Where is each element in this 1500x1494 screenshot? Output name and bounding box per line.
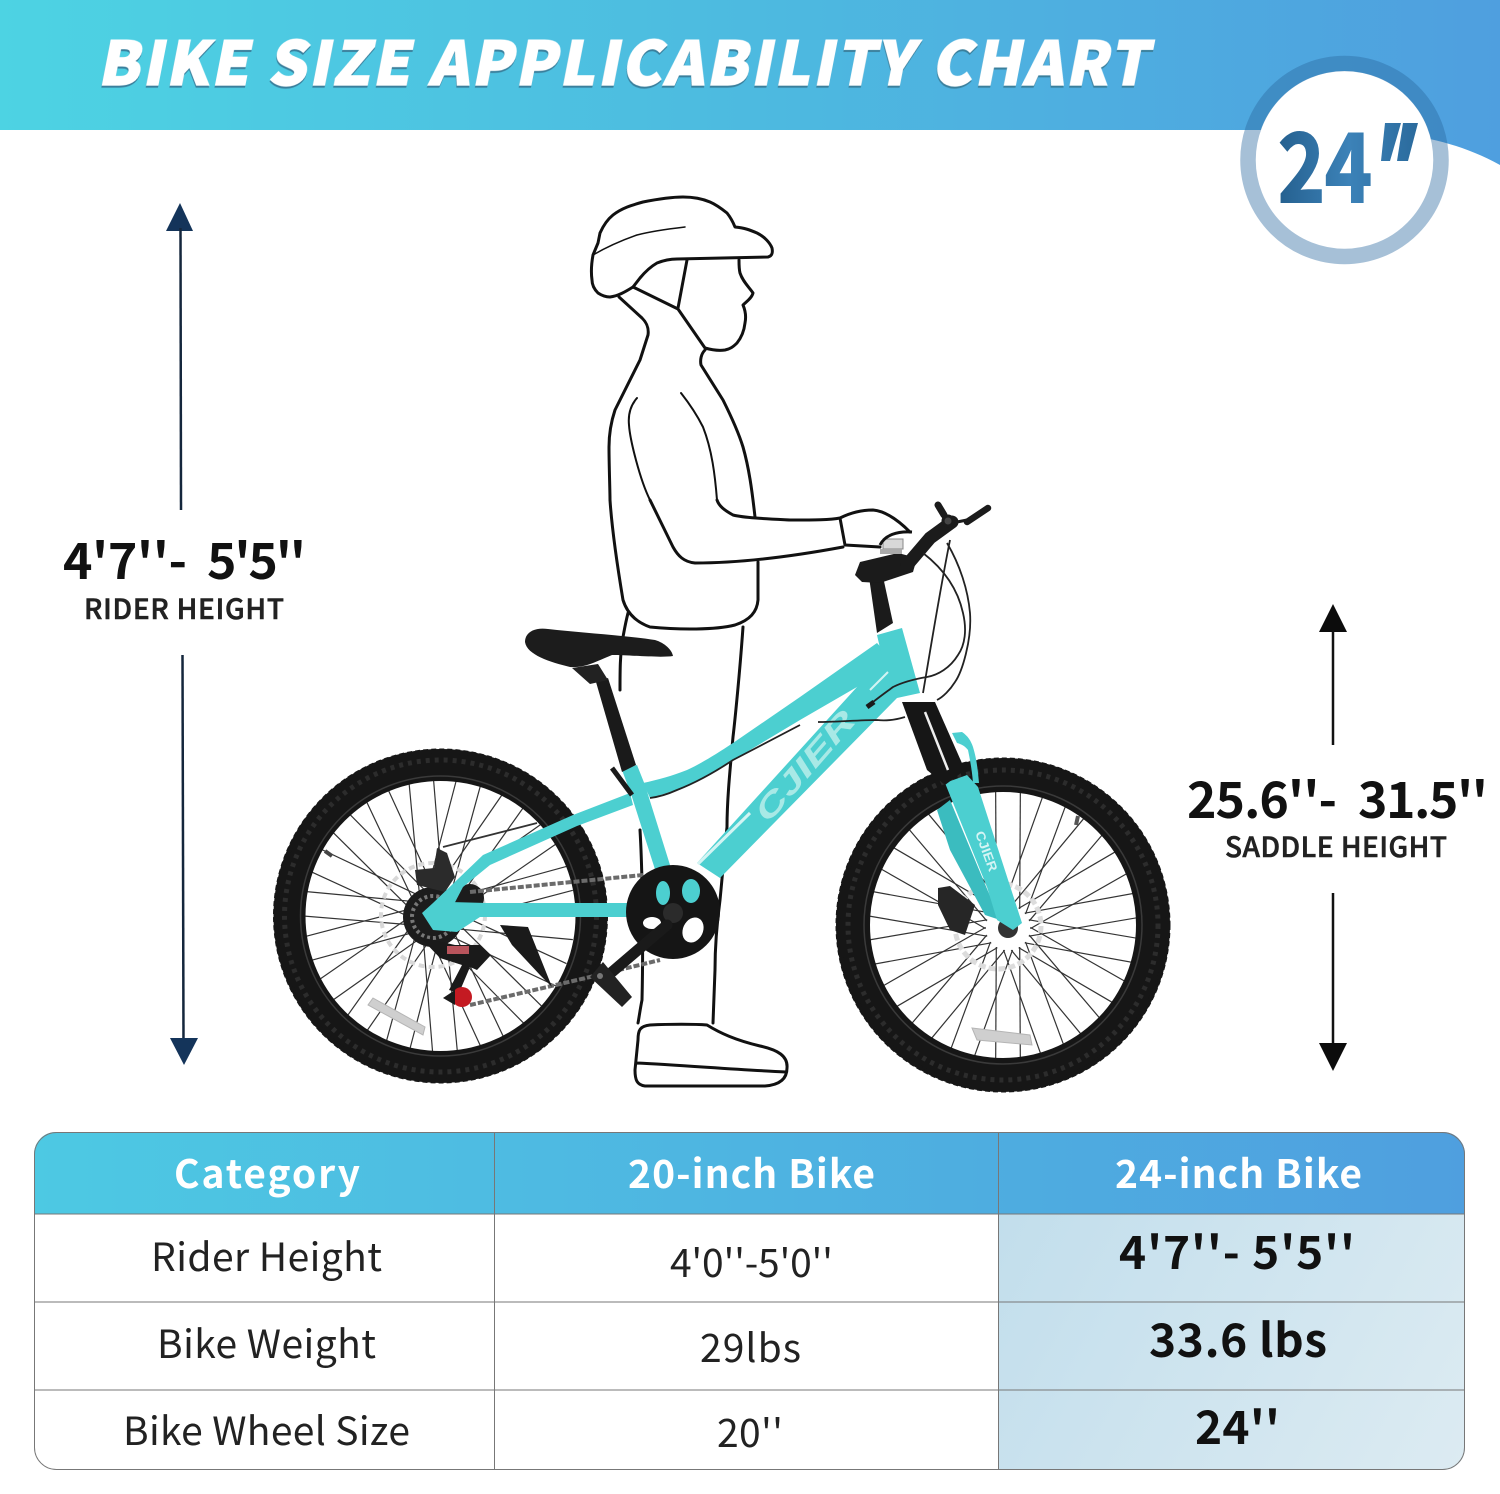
seat clamp xyxy=(612,768,632,795)
handlebar xyxy=(907,505,988,565)
brake cables xyxy=(650,540,970,798)
24-inch column background xyxy=(998,1214,1465,1470)
header banner xyxy=(0,0,1500,165)
24-inch values: 4'7''- 5'5'' xyxy=(1119,1217,1355,1283)
spoke magnet front xyxy=(1076,816,1078,825)
header labels: 20-inch Bike xyxy=(628,1144,875,1200)
shoe xyxy=(635,1024,787,1086)
fork brace xyxy=(952,732,979,783)
rear tyre xyxy=(276,751,606,1081)
legs xyxy=(620,613,743,1023)
chain xyxy=(470,875,660,1005)
steerer xyxy=(868,570,893,633)
row labels: Rider Height xyxy=(151,1227,382,1283)
size badge: 24 inch: 24 xyxy=(1278,93,1372,230)
saddle height label: 31.5'' xyxy=(1358,761,1488,833)
comparison table xyxy=(34,1132,1465,1470)
rider height arrow xyxy=(166,203,198,1065)
saddle xyxy=(525,629,673,667)
20-inch values xyxy=(670,1233,833,1459)
20-inch values: 4'0''-5'0'' xyxy=(670,1233,833,1289)
front wheel spokes xyxy=(866,787,1150,1069)
title: BIKE SIZE APPLICABILITY CHART xyxy=(94,17,1161,103)
saddle height label xyxy=(1187,761,1488,866)
seat stay xyxy=(422,793,633,913)
torso and jacket xyxy=(609,297,758,629)
saddle height label: 25.6''- xyxy=(1187,761,1337,833)
rear derailleur xyxy=(420,937,491,1007)
suspension fork xyxy=(902,702,965,785)
cable grommet xyxy=(867,702,874,707)
top tube xyxy=(643,643,893,798)
rear brake disc xyxy=(381,863,485,967)
rear reflector xyxy=(368,998,425,1035)
rider height label: 5'5'' xyxy=(207,522,306,594)
row labels xyxy=(123,1227,410,1457)
table header row xyxy=(34,1132,1465,1214)
jacket creases xyxy=(629,393,717,500)
frame highlights xyxy=(698,672,888,864)
fork blade xyxy=(945,775,1022,930)
rider height label: 4'7''- xyxy=(63,522,187,594)
front reflector xyxy=(972,1028,1032,1045)
front tyre xyxy=(838,760,1168,1090)
logo on down tube: CJIER xyxy=(748,704,863,829)
24-inch values: 24'' xyxy=(1195,1392,1280,1458)
frame xyxy=(422,628,1022,932)
helmet crease xyxy=(593,227,685,255)
child rider outline xyxy=(591,197,910,1086)
20-inch values: 29lbs xyxy=(700,1318,801,1374)
table grid xyxy=(34,1132,1465,1470)
logo on fork: CJIER xyxy=(972,829,1001,874)
front brake disc xyxy=(938,883,1041,969)
24-inch values xyxy=(1119,1217,1355,1458)
header labels: 24-inch Bike xyxy=(1115,1144,1362,1200)
row labels: Bike Wheel Size xyxy=(123,1401,410,1457)
head tube xyxy=(877,628,920,698)
fork rear leg xyxy=(937,800,1000,920)
bell xyxy=(880,532,912,554)
rider height label: RIDER HEIGHT xyxy=(84,588,284,628)
saddle height label: SADDLE HEIGHT xyxy=(1225,826,1447,866)
rider height label xyxy=(63,522,306,628)
stem xyxy=(855,553,917,583)
saddle clamp xyxy=(572,664,608,684)
row labels: Bike Weight xyxy=(157,1314,376,1370)
arm and hand xyxy=(650,500,910,563)
header labels: Category xyxy=(174,1144,360,1200)
header labels xyxy=(174,1144,1362,1200)
chainring xyxy=(626,865,720,959)
chain guard xyxy=(500,925,552,987)
seat tube xyxy=(622,765,682,885)
20-inch values: 20'' xyxy=(717,1403,783,1459)
rear wheel spokes xyxy=(291,773,575,1057)
chain stay xyxy=(422,902,630,932)
seat post xyxy=(596,678,636,772)
head and face xyxy=(633,260,753,350)
helmet xyxy=(591,197,772,297)
24-inch values: 33.6 lbs xyxy=(1149,1305,1327,1371)
saddle height arrow xyxy=(1319,604,1347,1071)
down tube xyxy=(697,650,900,878)
crank and pedal xyxy=(590,925,667,1007)
rear cassette and caliper xyxy=(403,823,537,947)
spoke magnet rear xyxy=(325,851,332,856)
size badge: 24 inch xyxy=(1248,64,1441,256)
bicycle xyxy=(276,505,1168,1090)
